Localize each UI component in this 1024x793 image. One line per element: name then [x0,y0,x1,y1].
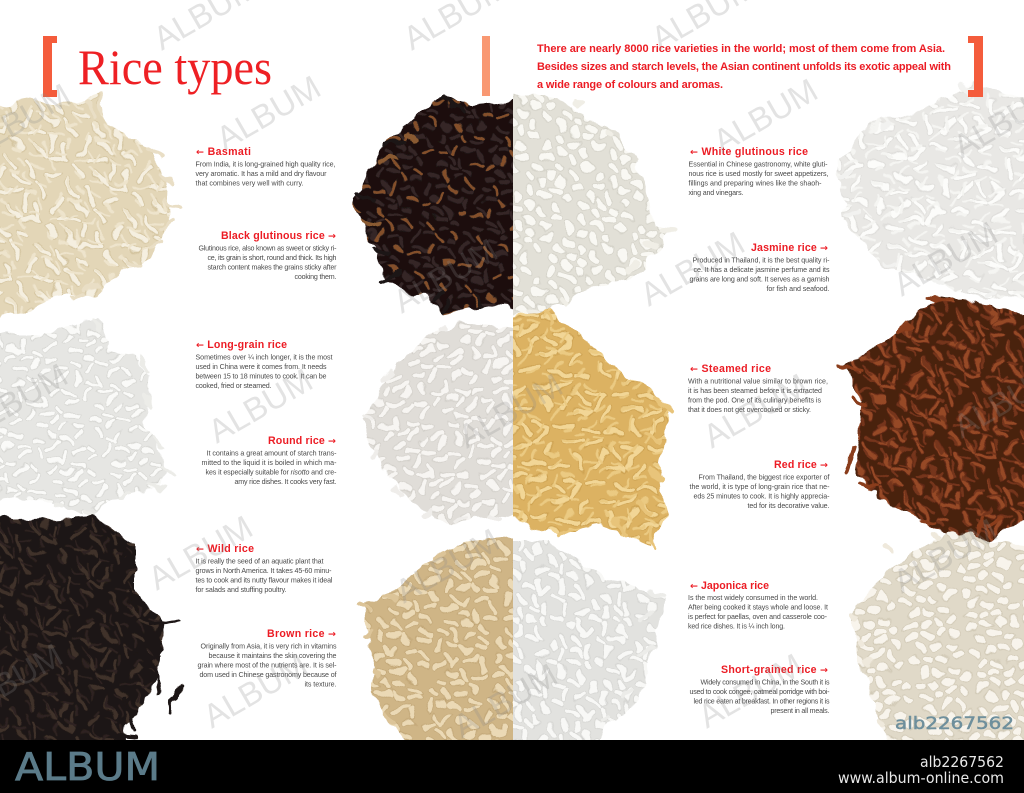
footer url: www.album-online.com [838,769,1004,787]
rice pile: steamed [495,310,673,548]
text block: wild rice: ← Wild rice [196,543,254,555]
text block: black glutinous rice: Black glutinous rice → [221,230,336,242]
rice pile: wild [0,515,184,760]
text block: round rice: mitted to the liquid it is boiled in which ma- [202,459,337,467]
watermarks: ALBUM [692,646,809,735]
intro text [537,43,951,91]
text block: white glutinous rice: nous rice is used mostly for sweet appetizers, [688,170,829,178]
text block: white glutinous rice: fillings and preparing wines like the shaoh- [688,180,822,188]
footer logo: ALBUM [15,745,160,789]
text block: white glutinous rice: ← White glutinous rice [690,146,808,158]
watermarks: ALBUM [389,521,506,610]
footer id: alb2267562 [920,753,1004,771]
watermarks: ALBUM [887,511,1004,600]
text block: japonica rice: Is the most widely consumed in the world. [688,594,818,602]
text block: brown rice: dom used in Chinese gastronomy because of [200,671,337,679]
text block: steamed rice [688,363,828,414]
left bracket [43,36,57,97]
text block: white glutinous rice: Essential in Chinese gastronomy, white gluti- [688,160,828,168]
watermarks: ALBUM [887,214,1004,303]
text block: round rice: amy rice dishes. It cooks very fast. [234,478,337,486]
text block: short-grained rice: Widely consumed in China, in the South it is [700,678,830,686]
rice pile: red [838,295,1024,545]
watermarks: ALBUM [387,231,504,320]
text block: long-grain rice: cooked, fried or steamed. [196,382,272,390]
text block: red rice: From Thailand, the biggest rice exporter of [698,474,830,482]
text block: brown rice: because it maintains the skin covering the [208,652,337,660]
text block: wild rice [196,543,333,594]
rice pile: basmati [0,95,178,322]
text block: short-grained rice: used to cook congee, oatmeal porridge with boi- [690,688,830,696]
rice pile: black glutinous [352,97,530,315]
rice pile: long-grain [0,318,173,515]
text block: basmati: ← Basmati [196,146,251,158]
rice pile: round [362,322,530,525]
text block: short-grained rice: present in all meals. [770,707,830,715]
text block: long-grain rice: between 15 to 18 minutes to cook. It can be [196,372,327,380]
rice pile: short-grained [850,532,1024,760]
text block: black glutinous rice [198,230,337,281]
text block: jasmine rice: for fish and seafood. [766,285,830,293]
watermarks: ALBUM [197,646,314,735]
text block: long-grain rice: Sometimes over ¼ inch longer, it is the most [196,354,333,362]
text block: round rice [202,435,337,486]
text block: japonica rice [688,580,828,630]
text block: jasmine rice: Jasmine rice → [751,242,828,254]
text block: jasmine rice: Produced in Thailand, it is the best quality ri- [692,256,830,264]
watermarks: ALBUM [210,68,327,157]
image id stamp: alb2267562 [895,714,1014,734]
rice pile: white top right [838,84,1024,300]
text block: wild rice: tes to cook and its nutty flavour makes it ideal [196,576,333,584]
text block: basmati: From India, it is long-grained high quality rice, [196,160,336,168]
text block: jasmine rice: grains are long and soft. It serves as a garnish [690,276,830,284]
text block: wild rice: grows in North America. It takes 45-60 minu- [196,567,332,575]
text block: brown rice: its texture. [304,680,337,688]
text block: long-grain rice: used in China were it comes from. It needs [196,363,327,371]
text block: round rice: It contains a great amount of starch trans- [206,450,337,458]
intro text: a wide range of colours and aromas. [537,79,723,91]
text block: long-grain rice: ← Long-grain rice [196,339,287,351]
text block: black glutinous rice: ce, its grain is short, round and thick. Its high [208,254,337,262]
text block: brown rice: Brown rice → [267,628,336,640]
rice pile: brown [356,536,513,740]
text block: brown rice: Originally from Asia, it is very rich in vitamins [200,642,337,650]
text block: short-grained rice: Short-grained rice → [721,664,828,676]
text block: brown rice: grain where most of the nutrients are. It is sel- [198,662,337,670]
watermarks: ALBUM [142,508,259,597]
text block: black glutinous rice: Glutinous rice, also known as sweet or sticky ri- [198,244,337,252]
text block: long-grain rice [196,339,333,390]
watermarks: ALBUM [202,361,319,450]
watermarks: ALBUM [452,366,569,455]
text block: red rice: Red rice → [774,459,828,471]
text block: black glutinous rice: cooking them. [294,273,337,281]
footer band [0,740,1024,793]
text block: red rice: eds 25 minutes to cook. It is highly apprecia- [694,492,830,500]
text block: jasmine rice [690,242,830,293]
text block: japonica rice: ← Japonica rice [690,580,769,592]
text block: steamed rice: it is has been steamed before it is extracted [688,387,822,395]
text block: red rice [690,459,830,510]
text block: japonica rice: After being cooked it stays whole and loose. It [688,604,828,612]
right bracket [968,36,983,97]
text block: wild rice: It is really the seed of an aquatic plant that [196,558,324,566]
rice pile: japonica [513,540,666,740]
text block: red rice: ted for its decorative value. [748,502,830,510]
text block: steamed rice: that it does not get overcooked or sticky. [688,406,811,414]
text block: round rice: kes it especially suitable for risotto and cre- [206,468,337,476]
intro text: There are nearly 8000 rice varieties in the world; most of them come from Asia. [537,43,945,55]
text block: short-grained rice: led rice eaten at breakfast. In other regions it is [694,698,830,706]
text block: round rice: Round rice → [268,435,336,447]
watermarks: ALBUM [697,366,814,455]
rice pile: white glutinous [495,95,673,315]
text block: basmati: that combines very well with curry. [196,180,304,188]
text block: basmati [196,146,336,188]
text block: steamed rice: With a nutritional value similar to brown rice, [688,378,828,386]
text block: steamed rice: ← Steamed rice [690,363,771,375]
text block: japonica rice: ked rice dishes. It is ¼ inch long. [688,622,785,630]
text block: white glutinous rice [688,146,829,197]
text block: white glutinous rice: xing and vinegars. [688,189,744,197]
text block: short-grained rice [690,664,830,715]
watermarks: ALBUM [447,656,564,745]
text block: brown rice [198,628,337,688]
title: Rice types [78,39,272,95]
text block: red rice: the world, it is type of long-grain rice that ne- [690,483,830,491]
intro text: Besides sizes and starch levels, the Asian continent unfolds its exotic appeal with [537,61,951,73]
text block: japonica rice: is perfect for paellas, oven and casserole coo- [688,613,828,621]
text block: wild rice: for salads and stuffing poultry. [196,586,287,594]
watermarks: ALBUM [707,71,824,160]
text block: steamed rice: from the pod. One of its culinary benefits is [688,396,821,404]
text block: basmati: very aromatic. It has a mild and dry flavour [196,170,327,178]
watermarks: ALBUM [634,224,751,313]
centre bar [482,36,490,96]
text block: jasmine rice: ce. It has a delicate jasmine perfume and its [694,266,830,274]
text block: black glutinous rice: starch content makes the grains sticky after [208,264,337,272]
